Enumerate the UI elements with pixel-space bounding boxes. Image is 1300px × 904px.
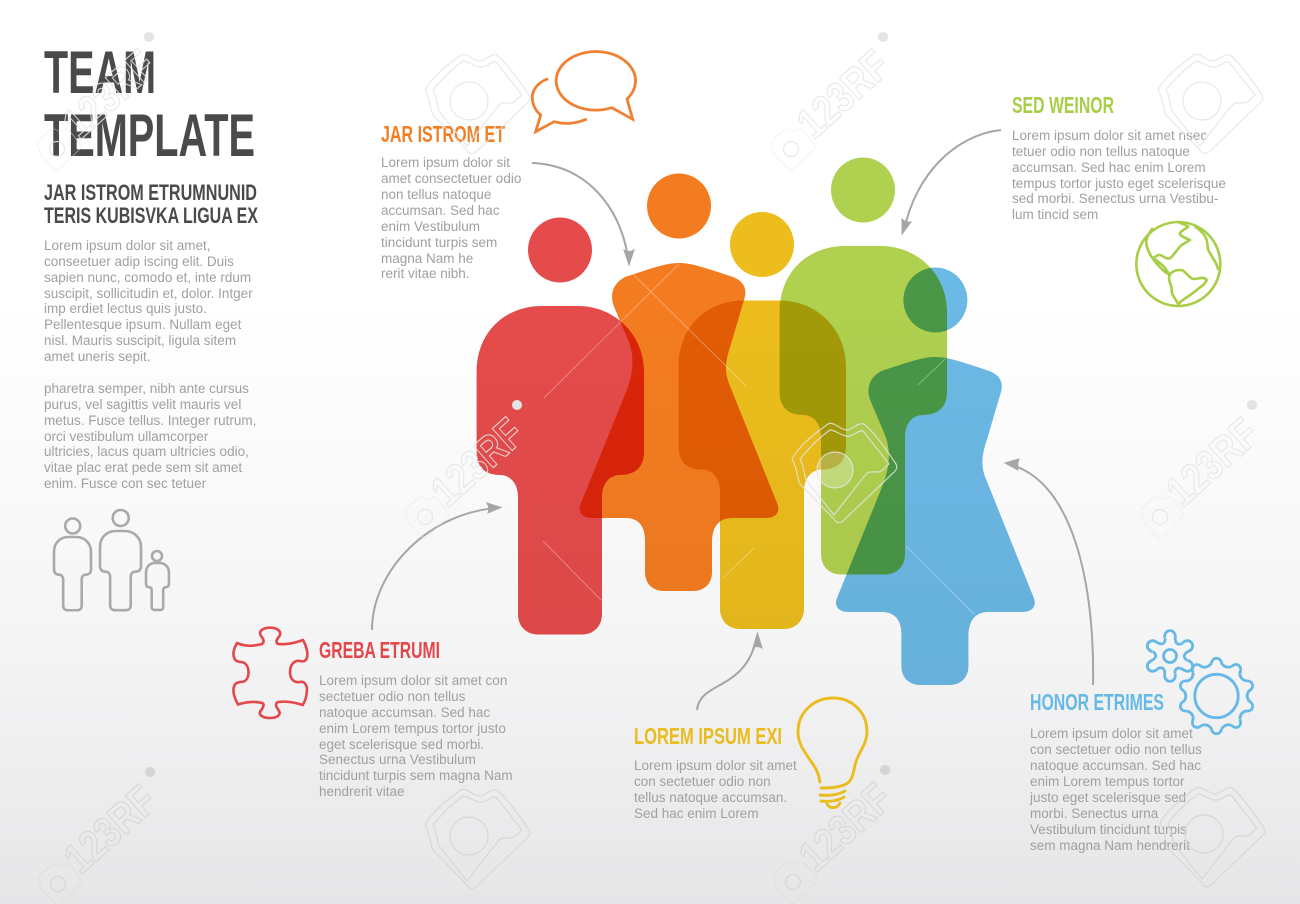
section: jar istrom et: tincidunt turpis sem	[381, 235, 497, 250]
section: jar istrom et: magna Nam he	[381, 251, 473, 266]
arrow: lorem ipsum to yellow figure	[697, 633, 762, 710]
figure: blue woman	[836, 268, 1035, 685]
intro text block: pharetra semper, nibh ante cursus	[44, 381, 249, 396]
icon: puzzle piece	[233, 628, 307, 718]
section: honor etrimes: sem magna Nam hendrerit	[1030, 838, 1190, 853]
section: jar istrom et: Lorem ipsum dolor sit	[381, 155, 510, 170]
arrow: sed weinor to green figure	[902, 130, 1001, 234]
watermark layer: 123RF	[788, 41, 899, 148]
section: honor etrimes: enim Lorem tempus tortor	[1030, 774, 1185, 789]
section: honor etrimes	[1029, 689, 1202, 853]
icon: speech bubbles	[532, 52, 636, 132]
watermark layer: 123RF	[55, 776, 166, 883]
section: sed weinor: Lorem ipsum dolor sit amet nsec	[1012, 128, 1207, 143]
section: sed weinor: accumsan. Sed hac enim Lorem	[1012, 160, 1206, 175]
section: greba etrumi: Lorem ipsum dolor sit amet con	[319, 673, 507, 688]
icon: large gear	[1176, 657, 1257, 735]
section: sed weinor: tempus tortor justo eget scelerisque	[1012, 176, 1226, 191]
section: jar istrom et: enim Vestibulum	[381, 219, 480, 234]
section: lorem ipsum exi	[634, 723, 797, 821]
section: sed weinor: sed morbi. Senectus urna Vestibu-	[1012, 191, 1218, 206]
figure: yellow man	[679, 212, 846, 629]
intro text block: Pellentesque ipsum. Nullam eget	[44, 317, 242, 332]
intro text block: nisl. Mauris suscipit, ligula sitem	[44, 333, 236, 348]
section: greba etrumi: tincidunt turpis sem magna Nam	[319, 768, 513, 783]
section: jar istrom et: amet consectetuer odio	[381, 171, 521, 186]
section: jar istrom et: JAR ISTROM ET	[381, 121, 505, 147]
watermark layer: 123RF	[790, 774, 901, 881]
intro text block: metus. Fusce tellus. Integer rutrum,	[44, 413, 256, 428]
section: jar istrom et: rerit vitae nibh.	[381, 266, 470, 281]
title: TEMPLATE	[44, 102, 255, 169]
section: sed weinor	[1012, 92, 1226, 222]
section: honor etrimes: HONOR ETRIMES	[1030, 689, 1164, 715]
intro text block: Lorem ipsum dolor sit amet,	[44, 238, 211, 253]
arrow: honor etrimes to blue figure	[1005, 459, 1093, 685]
watermark layer: 123RF	[422, 409, 533, 516]
arrow: jar istrom to orange figure	[532, 163, 634, 265]
section: honor etrimes: Lorem ipsum dolor sit amet	[1030, 726, 1193, 741]
intro text block: purus, vel sagittis velit mauris vel	[44, 397, 241, 412]
intro text block: ultricies, lacus quam ultricies odio,	[44, 444, 249, 459]
intro text block: amet uneris sepit.	[44, 349, 151, 364]
section: lorem ipsum exi: con sectetuer odio non	[634, 774, 771, 789]
icon: family outline	[54, 510, 169, 610]
section: greba etrumi: eget scelerisque sed morbi.	[319, 737, 484, 752]
section: greba etrumi: GREBA ETRUMI	[319, 637, 440, 663]
section: jar istrom et: accumsan. Sed hac	[381, 203, 500, 218]
subtitle	[44, 180, 258, 228]
section: sed weinor: tetuer odio non tellus natoque	[1012, 144, 1190, 159]
section: honor etrimes: justo eget scelerisque sed	[1029, 790, 1186, 805]
section: jar istrom et: non tellus natoque	[381, 187, 491, 202]
section: lorem ipsum exi: Sed hac enim Lorem	[634, 806, 759, 821]
section: sed weinor: lum tincid sem	[1012, 207, 1098, 222]
section: honor etrimes: con sectetuer odio non tellus	[1030, 742, 1202, 757]
figure: green man	[780, 158, 947, 574]
arrow: greba to red figure	[372, 503, 501, 630]
intro text block: suscipit, sollicitudin et, dolor. Intger	[44, 286, 253, 301]
watermark layer: 123RF	[54, 41, 165, 148]
icon: light bulb	[798, 698, 867, 808]
section: greba etrumi: sectetuer odio non tellus	[319, 689, 466, 704]
section: lorem ipsum exi: tellus natoque accumsan.	[634, 790, 787, 805]
section: sed weinor: SED WEINOR	[1012, 92, 1114, 118]
figure: orange woman	[580, 174, 778, 591]
subtitle: JAR ISTROM ETRUMNUNID	[44, 180, 257, 205]
section: lorem ipsum exi: LOREM IPSUM EXI	[634, 723, 782, 749]
intro text block: conseetuer adip iscing elit. Duis	[44, 254, 234, 269]
figure: red man	[477, 218, 644, 634]
section: honor etrimes: morbi. Senectus urna	[1030, 806, 1159, 821]
section: greba etrumi: enim Lorem tempus tortor justo	[319, 721, 506, 736]
section: honor etrimes: natoque accumsan. Sed hac	[1030, 758, 1201, 773]
intro text block: vitae plac erat pede sem sit amet	[44, 460, 242, 475]
section: honor etrimes: Vestibulum tincidunt turpis	[1030, 822, 1187, 837]
icon: globe	[1136, 222, 1220, 306]
intro text block: orci vestibulum ullamcorper	[44, 429, 209, 444]
title: TEAM	[44, 39, 156, 106]
subtitle: TERIS KUBISVKA LIGUA EX	[44, 203, 258, 228]
section: greba etrumi: Senectus urna Vestibulum	[319, 752, 476, 767]
intro text block: imp erdiet lectus quis justo.	[44, 301, 207, 316]
intro text block	[44, 238, 256, 491]
section: greba etrumi: natoque accumsan. Sed hac	[319, 705, 490, 720]
intro text block: sapien nunc, comodo et, inte rdum	[44, 270, 251, 285]
section: jar istrom et	[381, 121, 521, 281]
intro text block: enim. Fusce con sec tetuer	[44, 476, 207, 491]
section: lorem ipsum exi: Lorem ipsum dolor sit amet	[634, 758, 797, 773]
icon: small gear	[1142, 631, 1198, 681]
watermark layer: 123RF	[1157, 409, 1268, 516]
title	[44, 39, 255, 169]
section: greba etrumi	[319, 637, 513, 799]
section: greba etrumi: hendrerit vitae	[319, 784, 405, 799]
